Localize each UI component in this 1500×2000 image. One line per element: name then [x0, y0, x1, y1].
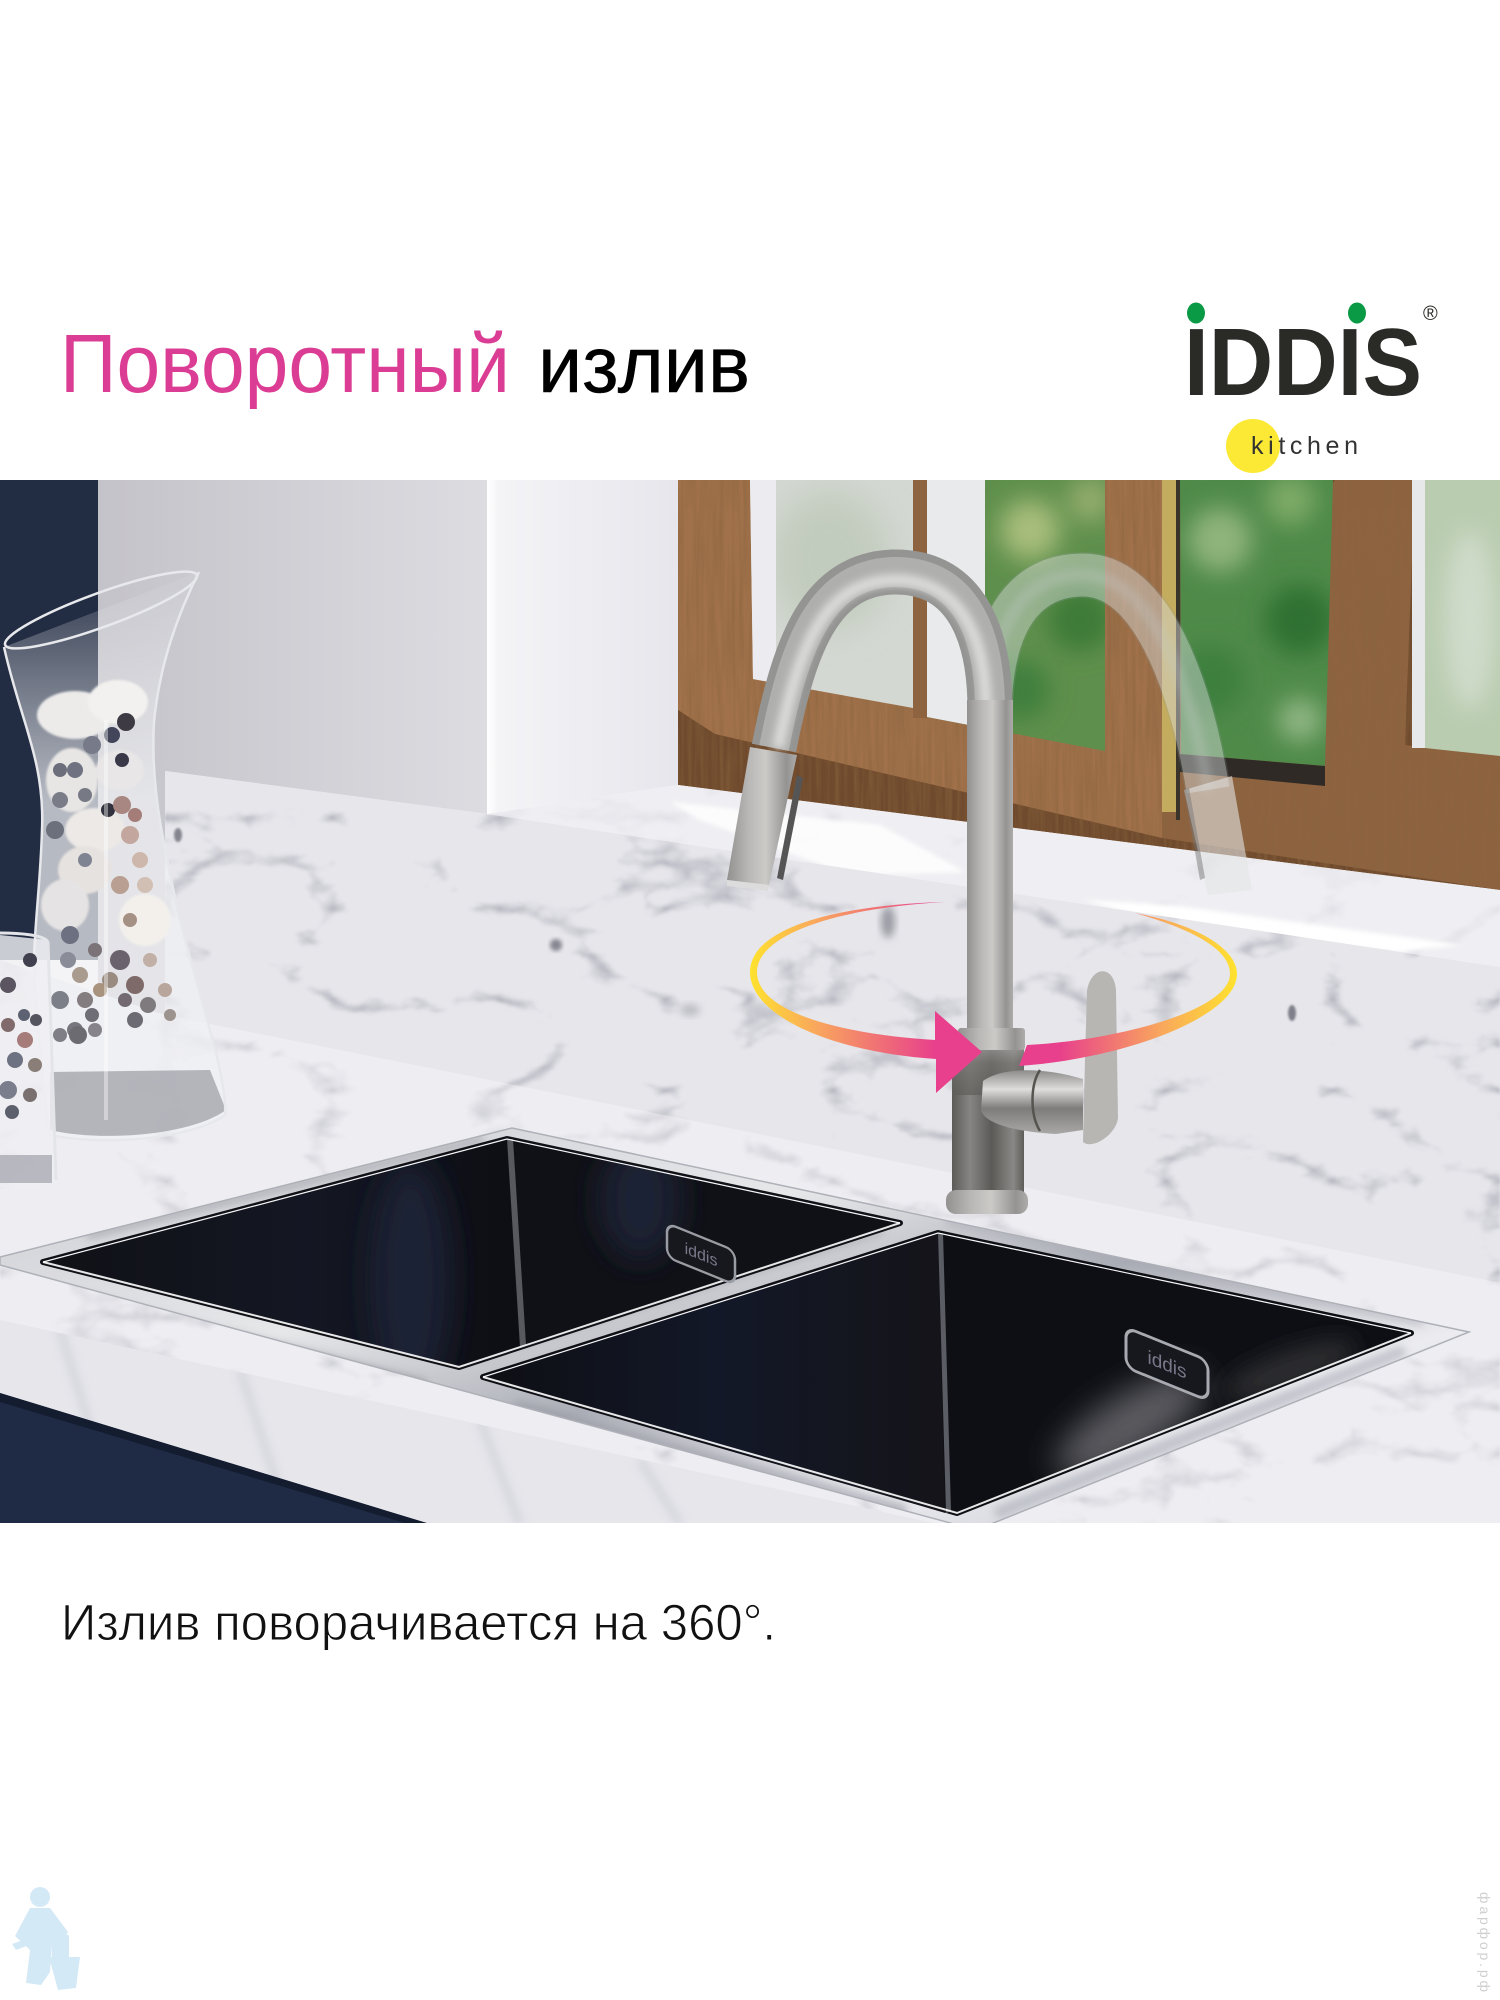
caption: Излив поворачивается на 360°. — [61, 1594, 776, 1651]
window frame wood — [678, 480, 1500, 890]
lower right frame wood — [1162, 480, 1500, 890]
right drain: iddis — [1147, 1347, 1187, 1384]
collar — [958, 1028, 1025, 1050]
rotation arrow: left with head — [750, 902, 982, 1093]
base ring — [946, 1190, 1028, 1214]
window — [678, 475, 1500, 890]
gold strip — [1162, 480, 1176, 812]
grey wall — [98, 480, 487, 1020]
white pier — [487, 480, 678, 814]
pane 3 — [1176, 475, 1335, 770]
berries and ice — [37, 680, 171, 946]
left sash wood — [678, 480, 1162, 838]
cartridge body — [981, 1070, 1083, 1134]
watermark: vertical text: фарфор.рф — [1477, 1892, 1493, 1992]
title: излив — [538, 320, 750, 409]
navy wall — [0, 480, 100, 960]
right drain — [1126, 1327, 1208, 1401]
logo: IDDIS kitchen — [1184, 302, 1438, 473]
black band under pane 3 — [1180, 754, 1325, 786]
spout arch — [774, 572, 990, 748]
vase rim — [0, 559, 203, 661]
faucet — [727, 572, 1118, 1214]
sink — [0, 1128, 1469, 1530]
lower body — [952, 1045, 1024, 1195]
title: Поворотный — [60, 317, 510, 410]
pane 4 — [1425, 480, 1500, 760]
watermark: plumber figure — [12, 1887, 80, 1990]
left drain — [667, 1223, 735, 1285]
counter top — [0, 960, 1500, 1523]
sink rim — [0, 1128, 1469, 1530]
marble backsplash — [165, 771, 1500, 1283]
lever handle — [1083, 971, 1118, 1144]
right bowl — [483, 1233, 1411, 1513]
mullion — [913, 480, 927, 718]
logo: IDDIS kitchen: IDDIS — [1184, 309, 1422, 416]
left drain: iddis — [685, 1239, 717, 1270]
rotation arrow: right — [1019, 913, 1237, 1066]
pane 1 — [750, 480, 915, 715]
counter front face — [48, 1331, 691, 1523]
water in vase — [50, 1070, 226, 1136]
upright pipe — [967, 700, 1013, 1035]
logo: IDDIS kitchen: ® — [1423, 303, 1438, 325]
cabinet — [0, 1393, 430, 1524]
left bowl — [43, 1139, 900, 1400]
photo: kitchen sink scene — [0, 475, 1500, 1530]
pane 2 — [927, 478, 1112, 755]
vase — [0, 559, 226, 1140]
window sill — [487, 785, 1500, 967]
spray head — [727, 747, 803, 891]
title — [60, 317, 750, 410]
logo: IDDIS kitchen: kitchen — [1251, 432, 1358, 460]
small glass — [0, 933, 56, 1188]
white inner frame — [1412, 480, 1425, 748]
ghost spout: rotated position — [990, 575, 1252, 895]
